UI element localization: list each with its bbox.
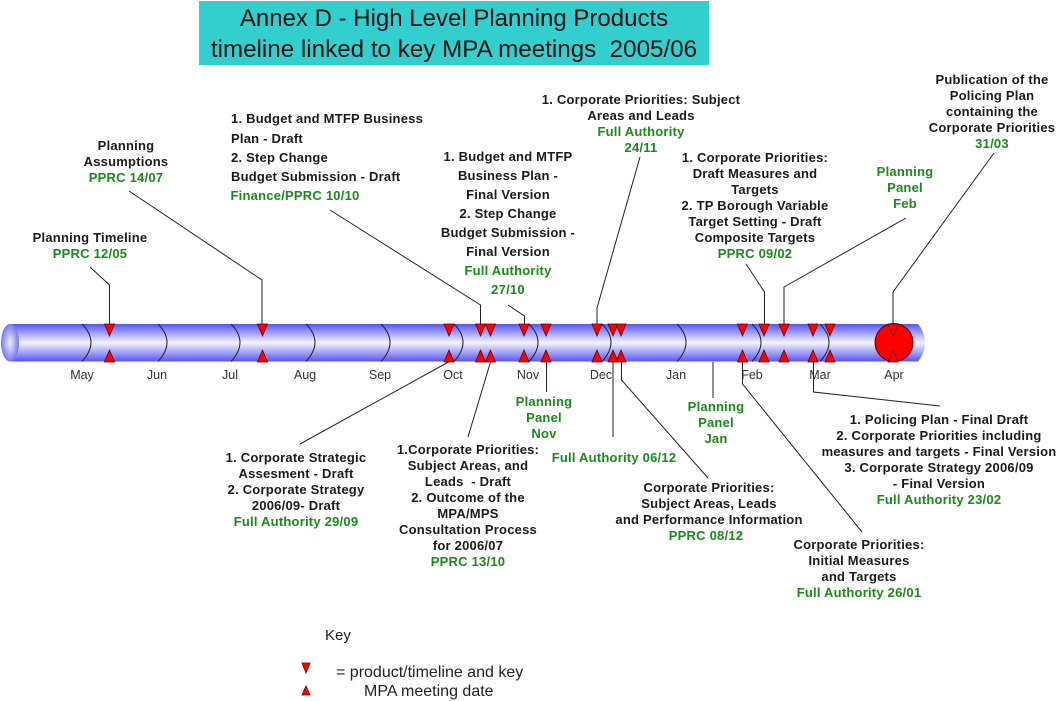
callout: budget final <box>441 149 575 297</box>
callout: full authority 06/12: Full Authority 06/12 <box>552 450 676 465</box>
callout: planning panel jan <box>688 399 744 446</box>
month labels: Sep <box>369 368 391 382</box>
callout: planning assumptions: PPRC 14/07 <box>89 170 163 185</box>
month labels: Jul <box>222 368 238 382</box>
callout: corporate priorities 26/01 <box>793 537 925 600</box>
callout: policing plan final draft: measures and targets - Final Version <box>822 444 1056 459</box>
callout: budget final: Final Version <box>466 187 550 202</box>
callout: planning panel nov: Nov <box>531 426 557 441</box>
callout: planning panel nov: Planning <box>516 394 572 409</box>
legend: MPA meeting date <box>364 683 494 700</box>
callout: corporate priorities 13/10: PPRC 13/10 <box>431 554 505 569</box>
callout: corporate priorities 09/02: PPRC 09/02 <box>718 246 792 261</box>
callout: planning panel feb <box>877 164 933 211</box>
callout: budget draft: 2. Step Change <box>231 150 328 165</box>
month labels: Aug <box>294 368 316 382</box>
callout: planning panel jan: Jan <box>704 431 728 446</box>
callout: planning timeline: Planning Timeline <box>33 230 147 245</box>
title: Annex D - High Level Planning Products <box>240 5 668 32</box>
callout: corporate priorities 13/10: MPA/MPS <box>437 506 499 521</box>
callout: corporate priorities 13/10: 1.Corporate Priorities: <box>397 442 539 457</box>
callout: publication of policing plan <box>929 72 1055 151</box>
callout: planning panel feb: Planning <box>877 164 933 179</box>
callout: policing plan final draft <box>822 412 1056 507</box>
callout: corporate priorities 13/10: Leads - Draft <box>425 474 512 489</box>
product triangles <box>104 324 898 336</box>
callout: corporate priorities 13/10 <box>397 442 539 569</box>
callout: publication of policing plan: Corporate Priorities <box>929 120 1055 135</box>
callout: corporate priorities 13/10: Subject Areas, and <box>408 458 528 473</box>
callout: corporate priorities 09/02: 2. TP Borough Variable <box>682 198 828 213</box>
callout: corporate priorities 24/11: 24/11 <box>625 140 657 155</box>
callout: planning panel jan: Planning <box>688 399 744 414</box>
callout: budget draft: Plan - Draft <box>231 131 303 146</box>
callout: publication of policing plan: containing the <box>946 104 1038 119</box>
title <box>199 1 709 65</box>
month labels: Mar <box>809 368 831 382</box>
callout: corporate strategic assessment: Full Authority 29/09 <box>234 514 358 529</box>
callout: corporate priorities 26/01: Full Authority 26/01 <box>797 585 921 600</box>
callout: policing plan final draft: - Final Version <box>893 476 985 491</box>
callout: corporate priorities 13/10: 2. Outcome of the <box>411 490 525 505</box>
callout: corporate priorities 26/01: Corporate Priorities: <box>793 537 925 552</box>
callout: policing plan final draft: 1. Policing Plan - Final Draft <box>850 412 1029 427</box>
callout: budget final: 2. Step Change <box>460 206 556 221</box>
callout: corporate priorities 08/12: and Performance Information <box>615 512 803 527</box>
callout: corporate priorities 26/01: and Targets <box>821 569 897 584</box>
legend: Key <box>325 627 351 644</box>
callout: corporate strategic assessment: Assesment - Draft <box>238 466 354 481</box>
callout: corporate priorities 24/11: 1. Corporate Priorities: Subject <box>542 92 741 107</box>
callout: budget draft: Budget Submission - Draft <box>231 169 401 184</box>
callout: budget draft: 1. Budget and MTFP Business <box>231 111 423 126</box>
callout: planning assumptions <box>84 138 168 185</box>
callout: corporate priorities 13/10: for 2006/07 <box>433 538 503 553</box>
callout: planning assumptions: Planning <box>98 138 154 153</box>
callout: corporate strategic assessment: 1. Corporate Strategic <box>226 450 366 465</box>
month labels: May <box>70 368 95 382</box>
callout: planning panel feb: Feb <box>893 196 917 211</box>
legend <box>302 627 523 700</box>
callout: corporate priorities 24/11: Areas and Leads <box>587 108 695 123</box>
callout: corporate priorities 08/12: PPRC 08/12 <box>669 528 743 543</box>
callout: corporate priorities 24/11 <box>542 92 741 155</box>
month labels: Jan <box>666 368 686 382</box>
callout: planning assumptions: Assumptions <box>84 154 168 169</box>
legend: = product/timeline and key <box>336 664 523 681</box>
callout: planning panel jan: Panel <box>698 415 734 430</box>
callout: publication of policing plan: Publication of the <box>935 72 1049 87</box>
connector lines <box>90 153 994 532</box>
callout: budget final: Final Version <box>466 244 550 259</box>
month labels: Oct <box>443 368 463 382</box>
month labels: Apr <box>884 368 904 382</box>
callout: corporate strategic assessment <box>226 450 366 529</box>
callout: corporate priorities 08/12: Corporate Priorities: <box>643 480 775 495</box>
meeting triangles <box>104 350 898 362</box>
callout: budget final: Business Plan - <box>458 168 558 183</box>
callout: planning timeline <box>33 230 147 261</box>
callout: corporate priorities 09/02: Composite Targets <box>695 230 815 245</box>
callout: corporate priorities 09/02: 1. Corporate Priorities: <box>682 150 828 165</box>
callout: corporate strategic assessment: 2006/09- Draft <box>252 498 341 513</box>
callout: budget final: 1. Budget and MTFP <box>444 149 573 164</box>
month labels: Dec <box>590 368 612 382</box>
callout: corporate priorities 24/11: Full Authority <box>597 124 685 139</box>
callout: planning timeline: PPRC 12/05 <box>53 246 127 261</box>
month labels: Jun <box>147 368 167 382</box>
callout: corporate priorities 08/12: Subject Areas, Leads <box>641 496 777 511</box>
callout: publication of policing plan: 31/03 <box>975 136 1009 151</box>
title: timeline linked to key MPA meetings 2005/06 <box>211 36 697 63</box>
callout: budget draft <box>231 111 423 203</box>
month labels: Feb <box>741 368 763 382</box>
callout: corporate priorities 09/02: Targets <box>731 182 779 197</box>
callout: corporate priorities 08/12 <box>615 480 803 543</box>
callout: budget draft: Finance/PPRC 10/10 <box>231 188 359 203</box>
callout: planning panel feb: Panel <box>887 180 923 195</box>
callout: policing plan final draft: 3. Corporate Strategy 2006/09 <box>844 460 1034 475</box>
callout: policing plan final draft: Full Authority 23/02 <box>877 492 1001 507</box>
month labels <box>70 368 904 382</box>
callout: budget final: 27/10 <box>491 282 525 297</box>
callout: planning panel nov <box>516 394 572 441</box>
callout: corporate priorities 13/10: Consultation Process <box>399 522 537 537</box>
callout: budget final: Budget Submission - <box>441 225 575 240</box>
timeline tube <box>1 324 925 362</box>
callout: corporate strategic assessment: 2. Corporate Strategy <box>228 482 365 497</box>
callout: budget final: Full Authority <box>464 263 552 278</box>
month labels: Nov <box>517 368 540 382</box>
callout: corporate priorities 26/01: Initial Measures <box>808 553 910 568</box>
callout: corporate priorities 09/02 <box>682 150 828 261</box>
callout: planning panel nov: Panel <box>526 410 562 425</box>
callout: corporate priorities 09/02: Target Setting - Draft <box>688 214 822 229</box>
callout: policing plan final draft: 2. Corporate Priorities including <box>836 428 1042 443</box>
callout: corporate priorities 09/02: Draft Measures and <box>693 166 817 181</box>
callout: publication of policing plan: Policing Plan <box>950 88 1034 103</box>
